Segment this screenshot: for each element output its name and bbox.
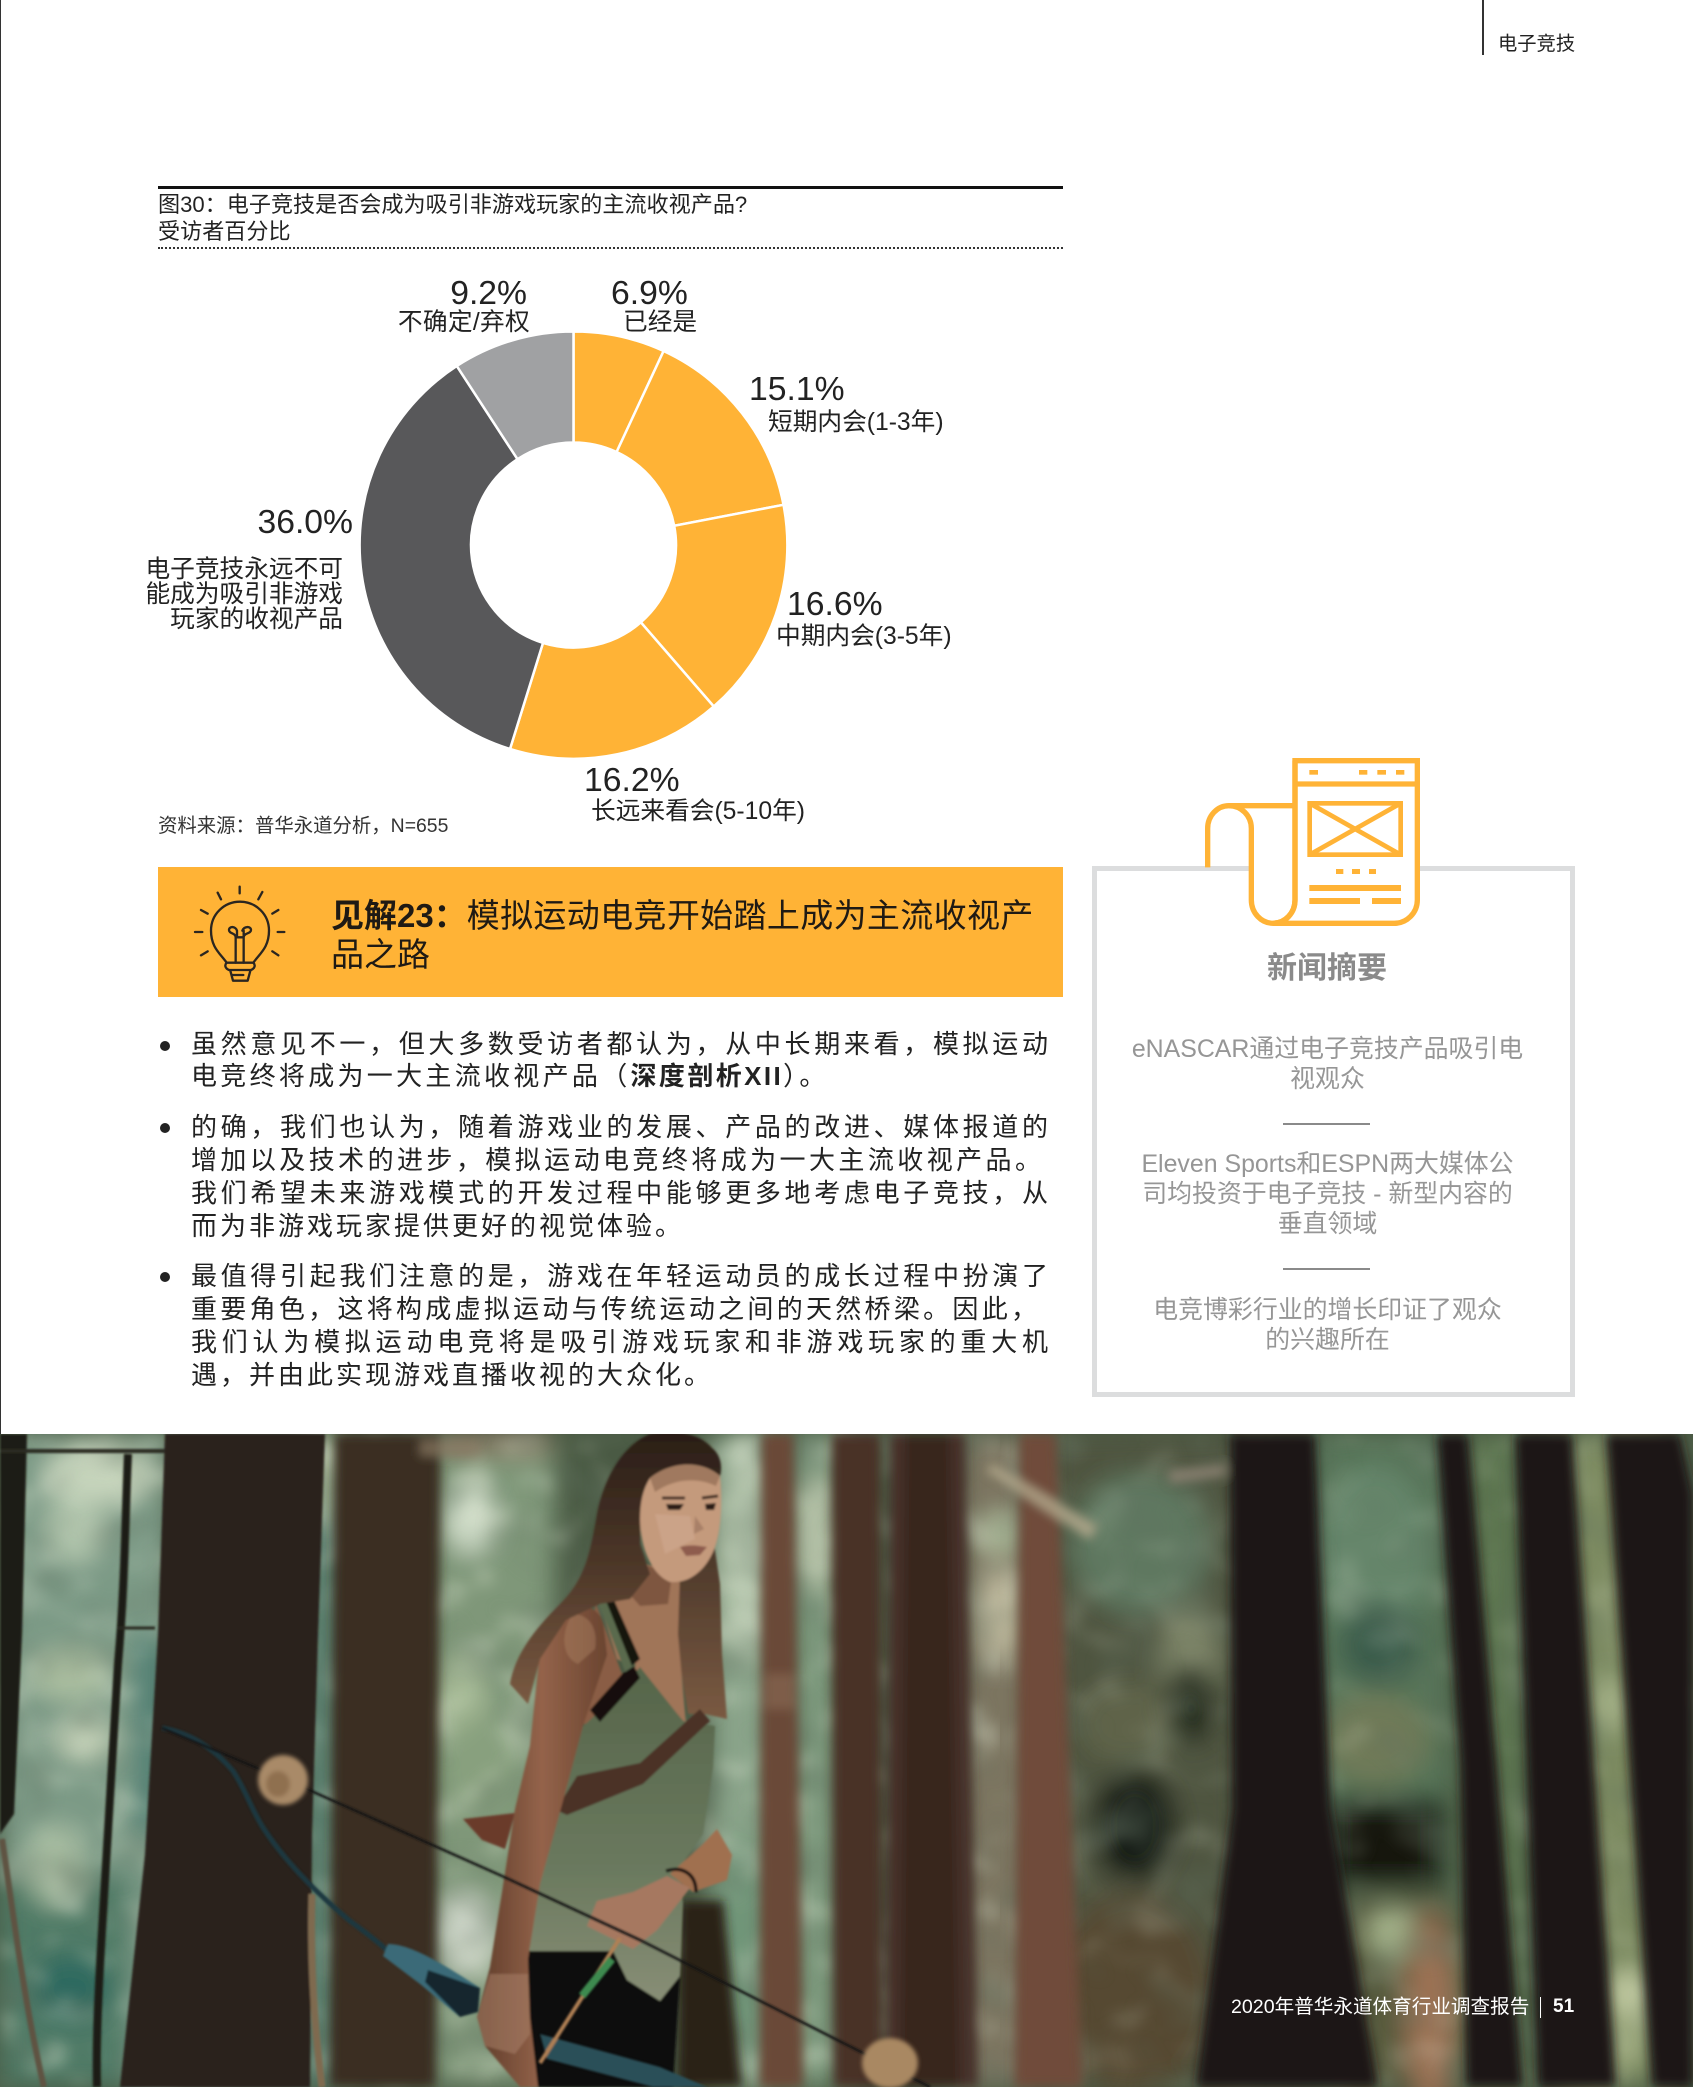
label: 9.2% undecided: 不确定/弃权 bbox=[398, 309, 530, 336]
bullet 3 bbox=[160, 1261, 1048, 1390]
label: 36.0% never: 能成为吸引非游戏 bbox=[145, 581, 343, 608]
panel: news digest bbox=[1092, 866, 1575, 1397]
chart title block: 图30：电子竞技是否会成为吸引非游戏玩家的主流收视产品? bbox=[158, 192, 747, 217]
bullet 1: 电竞终将成为一大主流收视产品（深度剖析XII）。 bbox=[191, 1061, 829, 1091]
label: 6.9% already bbox=[611, 274, 697, 336]
label: 6.9% already: 6.9% bbox=[611, 274, 688, 312]
label: 15.1% short term: 短期内会(1-3年) bbox=[768, 409, 944, 436]
news item 3: 的兴趣所在 bbox=[1265, 1326, 1390, 1354]
label: 16.6% mid term: 16.6% bbox=[787, 585, 883, 623]
label: 15.1% short term: 15.1% bbox=[749, 370, 845, 408]
bullet 2: 增加以及技术的进步，模拟运动电竞终将成为一大主流收视产品。 bbox=[191, 1145, 1041, 1175]
news item 3 bbox=[1153, 1296, 1502, 1354]
label: 6.9% already: 已经是 bbox=[623, 309, 697, 336]
news item 2: Eleven Sports和ESPN两大媒体公 bbox=[1141, 1150, 1514, 1178]
label: 36.0% never: 玩家的收视产品 bbox=[170, 606, 343, 633]
bullet 3: 遇，并由此实现游戏直播收视的大众化。 bbox=[191, 1360, 713, 1390]
label: 16.2% long term: 16.2% bbox=[584, 761, 680, 799]
chart title block: 受访者百分比 bbox=[158, 219, 291, 244]
header section divider bbox=[1482, 0, 1484, 55]
news item 1: 视观众 bbox=[1290, 1065, 1365, 1093]
bullet 2: 而为非游戏玩家提供更好的视觉体验。 bbox=[191, 1211, 684, 1241]
insight heading bbox=[331, 897, 1034, 973]
bow, string and arrow bbox=[162, 1728, 930, 2087]
foliage mottling bbox=[0, 1434, 1693, 2087]
archer bbox=[463, 1433, 732, 2087]
bullet 3: 我们认为模拟运动电竞将是吸引游戏玩家和非游戏玩家的重大机 bbox=[191, 1327, 1048, 1357]
insight heading: 品之路 bbox=[331, 936, 430, 973]
news item 2: 司均投资于电子竞技 - 新型内容的 bbox=[1142, 1180, 1513, 1208]
bullet 3: 最值得引起我们注意的是，游戏在年轻运动员的成长过程中扮演了 bbox=[191, 1261, 1048, 1291]
donut chart bbox=[360, 332, 786, 758]
label: 16.6% mid term bbox=[776, 585, 952, 650]
news item 1: eNASCAR通过电子竞技产品吸引电 bbox=[1132, 1035, 1523, 1063]
photo: archer in forest bbox=[0, 1434, 1693, 2087]
label: 16.2% long term: 长远来看会(5-10年) bbox=[591, 798, 805, 825]
label: 15.1% short term bbox=[749, 370, 944, 436]
bullet 1 bbox=[160, 1029, 1048, 1091]
news item 1 bbox=[1132, 1035, 1523, 1093]
page left edge line bbox=[0, 0, 1, 1434]
footer page number: 51 bbox=[1553, 1996, 1574, 2017]
bullet list: findings bbox=[160, 1029, 1048, 1390]
label: 36.0% never: 36.0% bbox=[257, 503, 353, 541]
bullet 2 bbox=[160, 1112, 1048, 1241]
sharp left trunk and branches bbox=[0, 1434, 325, 2087]
footer divider bbox=[1540, 1997, 1541, 2018]
bullet 2: 的确，我们也认为，随着游戏业的发展、产品的改进、媒体报道的 bbox=[191, 1112, 1048, 1142]
news divider 2 bbox=[1283, 1268, 1370, 1270]
label: 16.6% mid term: 中期内会(3-5年) bbox=[776, 623, 952, 650]
label: 16.2% long term bbox=[584, 761, 805, 825]
chart source note: 资料来源：普华永道分析，N=655 bbox=[158, 815, 448, 837]
bullet 2: 我们希望未来游戏模式的开发过程中能够更多地考虑电子竞技，从 bbox=[191, 1178, 1048, 1208]
insight heading: 见解23：模拟运动电竞开始踏上成为主流收视产 bbox=[331, 897, 1034, 934]
icon: newspaper scroll bbox=[1205, 758, 1420, 926]
label: 36.0% never: 电子竞技永远不可 bbox=[145, 556, 343, 583]
news item 3: 电竞博彩行业的增长印证了观众 bbox=[1153, 1296, 1502, 1324]
news item 2: 垂直领域 bbox=[1278, 1210, 1377, 1238]
footer report title: 2020年普华永道体育行业调查报告 bbox=[1231, 1996, 1529, 2018]
bullet 3: 重要角色，这将构成虚拟运动与传统运动之间的天然桥梁。因此， bbox=[191, 1294, 1037, 1324]
label: 9.2% undecided: 9.2% bbox=[450, 274, 527, 312]
insight banner bbox=[158, 867, 1063, 997]
out of focus trunks bbox=[330, 1434, 1693, 2087]
chart title block bbox=[158, 186, 1063, 249]
label: 36.0% never bbox=[145, 503, 353, 633]
news item 2 bbox=[1141, 1150, 1514, 1238]
icon: light bulb bbox=[194, 886, 286, 982]
label: 9.2% undecided bbox=[398, 274, 530, 336]
bullet 1: 虽然意见不一，但大多数受访者都认为，从中长期来看，模拟运动 bbox=[191, 1029, 1048, 1059]
blurred foliage background bbox=[0, 1434, 1660, 2087]
panel heading: 新闻摘要 bbox=[1267, 952, 1387, 985]
header section label: 电子竞技 bbox=[1498, 34, 1575, 55]
bow tufts bbox=[258, 1755, 918, 2087]
news divider 1 bbox=[1283, 1123, 1370, 1125]
